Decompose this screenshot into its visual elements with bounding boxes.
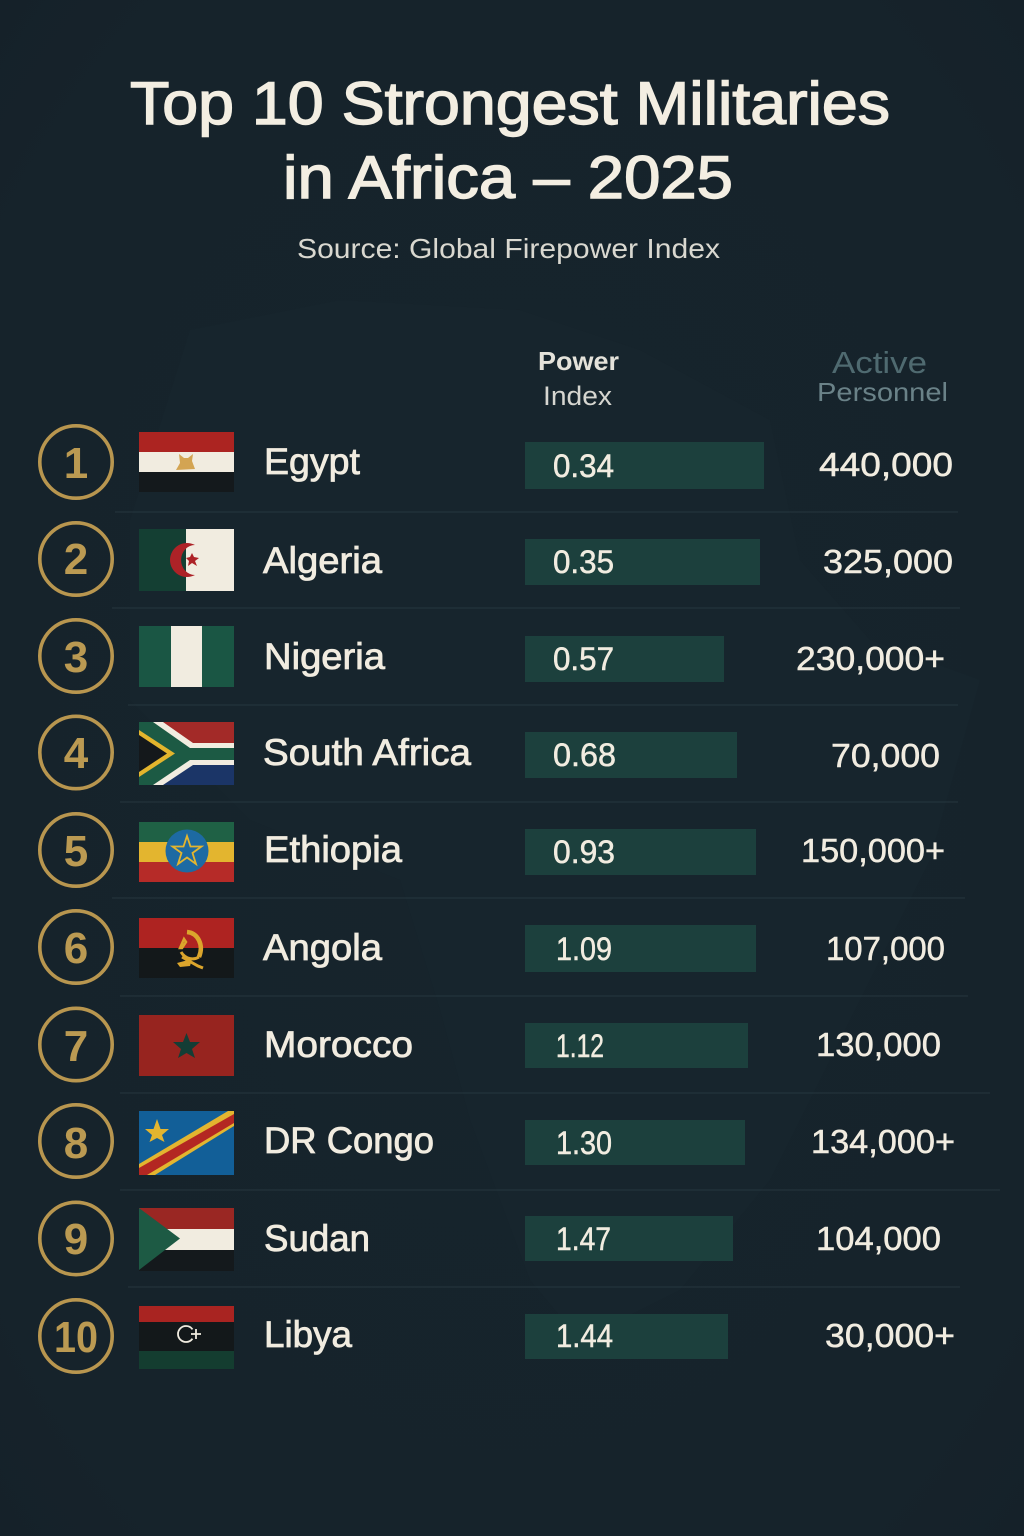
country name: Libya [264, 1314, 352, 1355]
power index value: 1.47 [556, 1221, 611, 1257]
rank badge 5: 5 [64, 827, 88, 876]
column header: power index: Power [538, 346, 619, 376]
row 5: Ethiopia [40, 814, 945, 886]
rank badge 7: 7 [64, 1022, 88, 1071]
subtitle: source: Source: Global Firepower Index [297, 233, 720, 264]
row 8: DR Congo [40, 1105, 955, 1177]
power index bar [525, 539, 760, 585]
rank badge 6 [40, 911, 112, 983]
column header: power index: Index [543, 381, 613, 411]
rank badge 6: 6 [64, 924, 88, 973]
active personnel: 230,000+ [796, 640, 945, 677]
power index bar [525, 1216, 733, 1261]
rank badge 3 [40, 620, 112, 692]
active personnel: 30,000+ [825, 1317, 955, 1354]
active personnel: 134,000+ [811, 1123, 955, 1160]
country name: Nigeria [264, 636, 385, 677]
rank badge 7 [40, 1008, 112, 1081]
power index bar [525, 1314, 728, 1359]
power index bar [525, 442, 764, 489]
rank badge 4 [40, 716, 112, 789]
active personnel: 130,000 [816, 1026, 941, 1063]
rank badge 2 [40, 523, 112, 595]
rank badge 4: 4 [64, 729, 89, 778]
rank badge 10 [40, 1300, 112, 1372]
column header: active personnel: Active [832, 345, 927, 380]
flag: Libya [139, 1306, 234, 1369]
power index value: 0.93 [553, 834, 615, 870]
rank badge 8 [40, 1105, 112, 1177]
row 3: Nigeria [40, 620, 945, 692]
rank badge 1: 1 [64, 439, 88, 488]
row 1: Egypt [40, 426, 953, 498]
rank badge 9 [40, 1202, 112, 1275]
column header: power index [538, 346, 619, 411]
rank badge 2: 2 [64, 535, 88, 584]
title [130, 70, 890, 211]
active personnel: 150,000+ [801, 832, 945, 869]
country name: Ethiopia [264, 829, 402, 870]
country name: South Africa [263, 732, 471, 773]
active personnel: 325,000 [823, 543, 953, 580]
row 10: Libya [40, 1300, 955, 1372]
country name: Algeria [263, 540, 382, 581]
power index bar [525, 1023, 748, 1068]
flag: Algeria [139, 529, 234, 591]
title: Top 10 Strongest Militaries [130, 70, 890, 137]
power index bar [525, 925, 756, 972]
power index value: 0.34 [553, 448, 614, 484]
country name: Egypt [264, 441, 361, 482]
active personnel: 104,000 [816, 1220, 941, 1257]
flag: Ethiopia [139, 822, 234, 882]
row 9: Sudan [40, 1202, 941, 1275]
power index bar [525, 1120, 745, 1165]
rank badge 9: 9 [64, 1215, 88, 1264]
flag: Morocco [139, 1015, 234, 1076]
active personnel: 107,000 [826, 930, 945, 967]
active personnel: 440,000 [819, 446, 953, 483]
flag: Nigeria [139, 626, 234, 687]
power index value: 1.12 [556, 1028, 604, 1064]
row 4: South Africa [40, 716, 940, 789]
column header: active personnel: Personnel [817, 377, 948, 407]
rank badge 8: 8 [64, 1119, 88, 1168]
power index value: 1.44 [556, 1318, 613, 1354]
row 2: Algeria [40, 523, 953, 595]
country name: DR Congo [264, 1120, 434, 1161]
power index value: 1.30 [556, 1125, 612, 1161]
power index value: 0.57 [553, 641, 614, 677]
row 6: Angola [40, 911, 945, 983]
rank badge 3: 3 [64, 633, 88, 682]
power index value: 0.35 [553, 544, 614, 580]
title: in Africa – 2025 [283, 144, 733, 211]
flag: South Africa [139, 722, 234, 785]
flag: Egypt [139, 432, 234, 492]
flag: Sudan [139, 1208, 234, 1271]
country name: Sudan [264, 1218, 370, 1259]
flag: DR Congo [139, 1111, 234, 1175]
power index bar [525, 829, 756, 875]
power index value: 1.09 [556, 931, 612, 967]
power index value: 0.68 [553, 737, 616, 773]
active personnel: 70,000 [831, 737, 940, 774]
column header: active personnel [817, 345, 948, 407]
flag: Angola [139, 918, 234, 978]
rank badge 5 [40, 814, 112, 886]
power index bar [525, 636, 724, 682]
country name: Morocco [264, 1024, 413, 1065]
rank badge 10: 10 [54, 1313, 98, 1362]
row 7: Morocco [40, 1008, 941, 1081]
country name: Angola [263, 927, 382, 968]
power index bar [525, 732, 737, 778]
rank badge 1 [40, 426, 112, 498]
